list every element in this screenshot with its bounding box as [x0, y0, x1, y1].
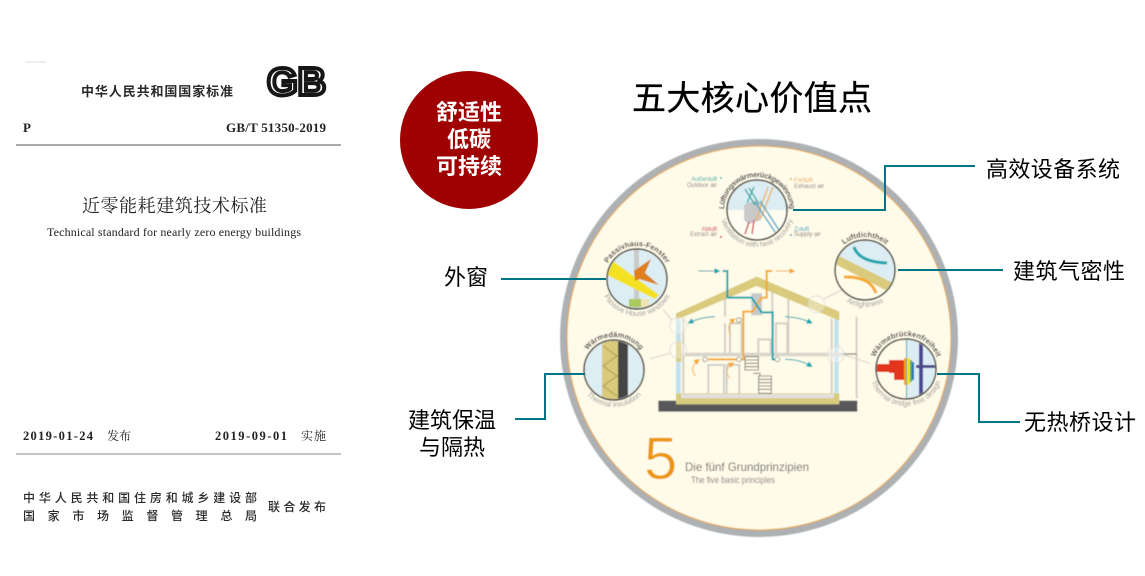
icon: passive house windows	[603, 242, 670, 316]
icon: thermal bridge free design: Thermal bridge free design	[872, 380, 941, 408]
label: insulation and heat isolation: 与隔热	[419, 435, 485, 460]
label: thermal bridge free design: 无热桥设计	[1024, 410, 1136, 435]
label: insulation and heat isolation	[408, 408, 496, 460]
legend: exhaust air	[794, 178, 824, 190]
icon: thermal insulation: Wärmedämmung	[583, 331, 644, 351]
legend: extract air: Abluft	[702, 227, 717, 233]
GB logo: GB	[267, 61, 326, 104]
air flow arrows	[689, 271, 811, 378]
panel: standard document cover	[16, 61, 341, 523]
icon: airtightness: Airtightness	[846, 298, 884, 309]
joint release: 联合发布	[268, 499, 326, 514]
heat recovery unit	[751, 293, 762, 315]
label: exterior windows: 外窗	[444, 265, 488, 290]
chart: house cross-section	[650, 271, 870, 412]
ducts	[708, 271, 772, 359]
english caption: The five basic principles	[691, 475, 775, 486]
icon: airtightness: Luftdichtheit	[841, 231, 889, 245]
badge: comfort, low carbon, sustainable: 舒适性	[436, 100, 502, 125]
category letter: P	[23, 120, 31, 135]
ground	[658, 401, 857, 412]
legend: outdoor air: Outdoor air	[687, 183, 717, 189]
big number five: 5	[644, 425, 677, 492]
issuing country heading: 中华人民共和国国家标准	[81, 84, 233, 99]
issuing authority line 1: 中华人民共和国住房和城乡建设部	[23, 490, 257, 505]
badge: comfort, low carbon, sustainable: 低碳	[447, 127, 491, 152]
effective date: 实施	[301, 429, 326, 443]
legend: supply air: Supply air	[794, 232, 821, 238]
legend: extract air	[690, 227, 717, 238]
icon: ventilation with heat recovery: Lüftungswärmerückgewinnung	[718, 172, 794, 210]
badge: comfort, low carbon, sustainable: 可持续	[436, 154, 502, 179]
label: insulation and heat isolation: 建筑保温	[408, 408, 496, 433]
standard number: GB/T 51350-2019	[226, 120, 326, 135]
title: 五大核心价值点	[632, 80, 872, 118]
icon: airtightness	[834, 231, 896, 309]
legend: supply air	[794, 227, 821, 238]
issue date	[23, 428, 131, 443]
legend dots	[720, 177, 792, 238]
icon: thermal bridge free design: Wärmebrückenfreiheit	[870, 330, 942, 358]
callout line: windows	[501, 278, 606, 280]
issuing authority line 2: 国家市场监督管理总局	[23, 508, 257, 523]
legend: exhaust air: Fortluft	[794, 178, 813, 184]
stairs	[745, 357, 771, 393]
icon: passive house windows: Passive House windows	[604, 294, 670, 316]
german caption: Die fünf Grundprinzipien	[685, 460, 809, 474]
badge: comfort, low carbon, sustainable	[400, 71, 538, 209]
icon: ventilation with heat recovery	[718, 172, 794, 248]
effective date: 2019-09-01	[215, 429, 287, 443]
walls	[676, 319, 681, 393]
detail markers	[670, 296, 844, 363]
callout line: high-efficiency equipment	[793, 166, 975, 210]
issue date: 发布	[107, 428, 131, 443]
effective date	[215, 429, 326, 443]
panel: five principles circle	[560, 138, 958, 538]
icon: passive house windows: Passivhaus-Fenster	[603, 242, 670, 264]
callout line: insulation	[515, 374, 585, 419]
legend: outdoor air	[687, 177, 717, 189]
legend: extract air: Extract air	[690, 232, 717, 238]
english title: Technical standard for nearly zero energy buildings	[47, 225, 301, 239]
label: high-efficiency equipment systems: 高效设备系统	[986, 157, 1120, 182]
roof	[676, 277, 839, 321]
document title: 近零能耗建筑技术标准	[82, 196, 267, 216]
issue date: 2019-01-24	[23, 429, 94, 443]
icon: ventilation with heat recovery: Ventilation with heat recovery	[722, 218, 794, 248]
legend: supply air: Zuluft	[794, 227, 809, 233]
callout line: airtightness	[898, 269, 1003, 271]
callout line: thermal bridge	[937, 374, 1020, 422]
legend: outdoor air: Außenluft	[691, 177, 717, 183]
valves	[703, 318, 780, 362]
icon: thermal bridge free design	[870, 330, 942, 408]
icon: thermal insulation	[582, 331, 646, 408]
label: building airtightness: 建筑气密性	[1013, 259, 1125, 284]
legend: exhaust air: Exhaust air	[794, 184, 824, 190]
icon: thermal insulation: Thermal insulation	[588, 391, 642, 408]
